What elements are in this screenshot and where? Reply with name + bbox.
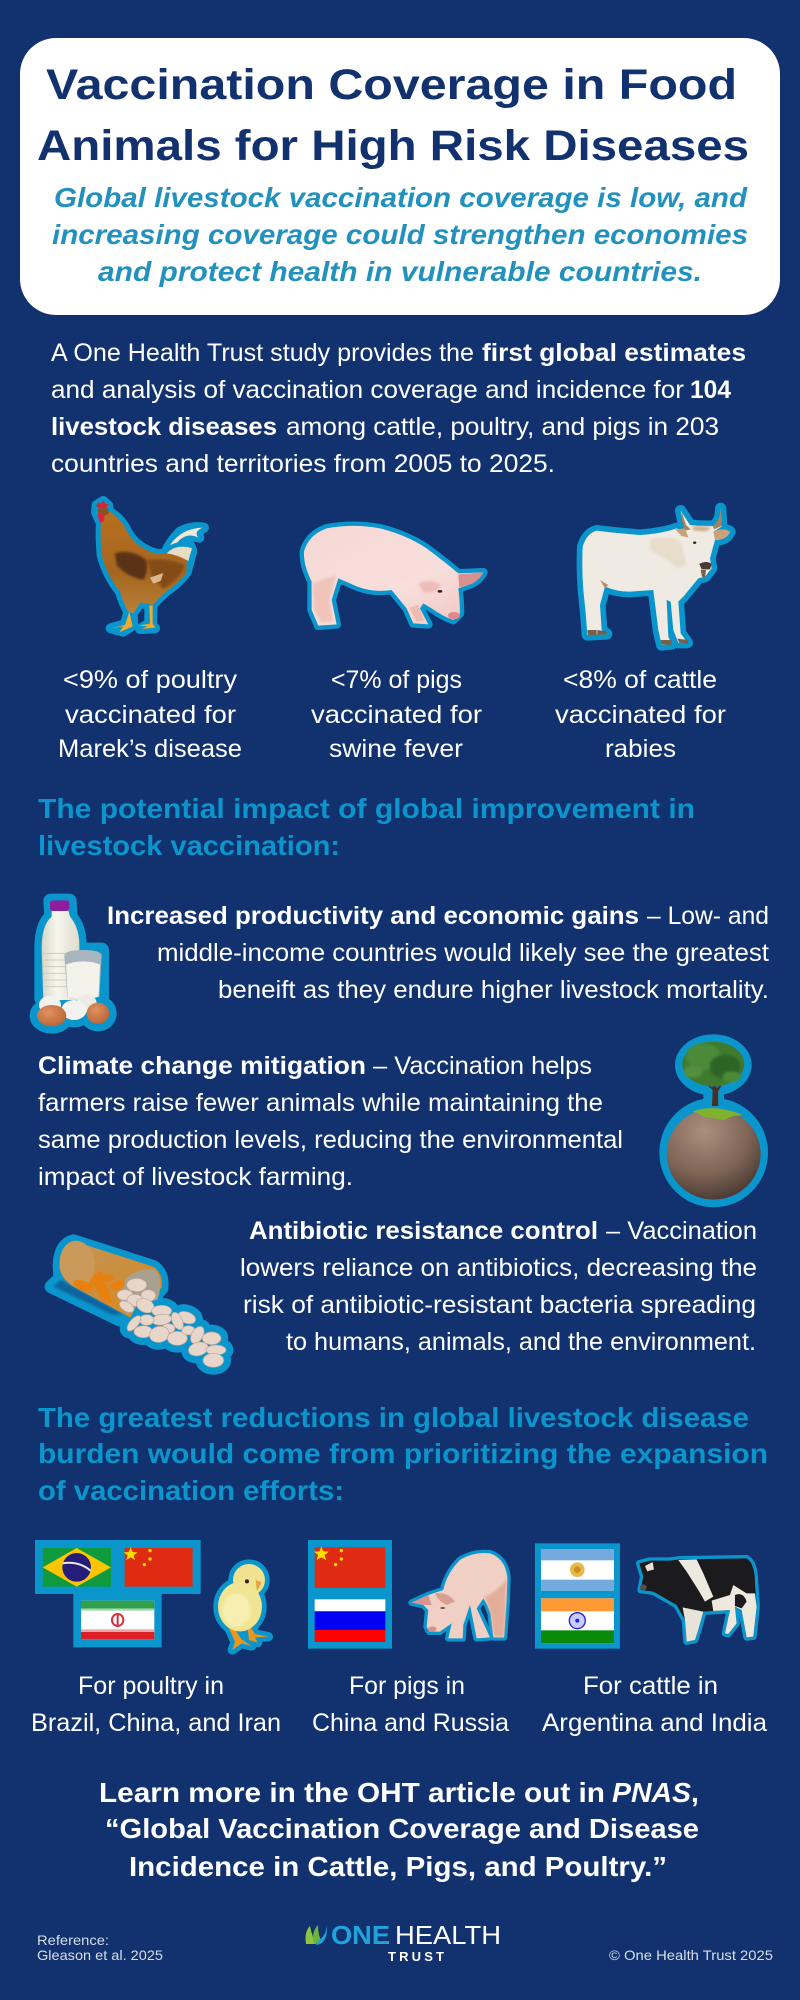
text block: cattle countries — [542, 1672, 767, 1737]
title — [37, 61, 749, 170]
callout: learn more: Incidence in Cattle, Pigs, and Poultry.” — [129, 1851, 667, 1882]
icon: black and white cow — [639, 1558, 757, 1642]
icon: chick — [218, 1564, 268, 1650]
text block: cattle statistic: vaccinated for — [555, 701, 726, 729]
text block: pig statistic: vaccinated for — [311, 701, 482, 729]
text block: antibiotic resistance: to humans, animals, and the environment. — [286, 1328, 756, 1356]
heading: greatest reductions: The greatest reductions in global livestock disease — [38, 1402, 749, 1433]
text block: antibiotic resistance: lowers reliance on antibiotics, decreasing the — [240, 1254, 757, 1282]
icon: chicken — [96, 500, 204, 632]
text block: poultry statistic — [58, 666, 242, 763]
text block: poultry countries: Brazil, China, and Iran — [31, 1709, 281, 1737]
panel: title card — [20, 38, 780, 315]
subtitle — [52, 182, 748, 287]
icon: pig — [304, 526, 483, 626]
text block: study introduction: livestock diseases — [51, 413, 277, 441]
text block: pig statistic — [311, 666, 482, 763]
icon: pig facing left — [412, 1553, 507, 1638]
flags: Argentina, India — [535, 1543, 620, 1649]
text block: productivity: middle-income countries would likely see the greatest — [157, 939, 769, 967]
text block: climate: Climate change mitigation — [38, 1052, 366, 1080]
text block: productivity — [107, 902, 769, 1004]
heading: potential impact: livestock vaccination: — [38, 830, 340, 861]
reference note — [37, 1932, 163, 1963]
heading: potential impact: The potential impact of global improvement in — [38, 793, 695, 824]
logo: One Health Trust: ONE — [331, 1920, 390, 1950]
icon: pill bottle — [51, 1238, 226, 1367]
text block: poultry countries: For poultry in — [78, 1672, 224, 1700]
text block: pig statistic: swine fever — [329, 735, 463, 763]
text block: cattle countries: For cattle in — [583, 1672, 718, 1700]
logo: One Health Trust: TRUST — [388, 1949, 444, 1964]
text block: climate: – Vaccination helps — [373, 1052, 592, 1080]
icon: logo leaf — [306, 1925, 327, 1945]
text block: pig statistic: <7% of pigs — [331, 666, 462, 694]
callout: learn more: “Global Vaccination Coverage and Disease — [105, 1813, 699, 1844]
text block: productivity: beneift as they endure higher livestock mortality. — [218, 976, 769, 1004]
subtitle: and protect health in vulnerable countries. — [98, 256, 702, 287]
icon: milk and eggs — [37, 900, 109, 1026]
reference note: Gleason et al. 2025 — [37, 1947, 163, 1963]
flags: China, Russia — [308, 1540, 392, 1649]
text block: pig countries: For pigs in — [349, 1672, 465, 1700]
callout: learn more: , — [691, 1777, 699, 1808]
text block: study introduction — [51, 339, 746, 478]
text block: pig countries — [312, 1672, 509, 1737]
text block: climate: farmers raise fewer animals while maintaining the — [38, 1089, 603, 1117]
text block: antibiotic resistance: Antibiotic resistance control — [249, 1217, 598, 1245]
text block: pig countries: China and Russia — [312, 1709, 509, 1737]
text block: study introduction: 104 — [690, 376, 731, 404]
text block: antibiotic resistance: risk of antibiotic-resistant bacteria spreading — [243, 1291, 756, 1319]
text block: study introduction: among cattle, poultry, and pigs in 203 — [286, 413, 719, 441]
flags: Brazil, China, Iran — [35, 1540, 201, 1647]
copyright note: © One Health Trust 2025 — [609, 1947, 773, 1963]
text block: study introduction: countries and territories from 2005 to 2025. — [51, 450, 555, 478]
subtitle: increasing coverage could strengthen economies — [52, 219, 748, 250]
logo: One Health Trust: HEALTH — [395, 1920, 501, 1950]
text block: climate: same production levels, reducing the environmental — [38, 1126, 623, 1154]
title: Animals for High Risk Diseases — [37, 122, 749, 170]
text block: cattle statistic: rabies — [605, 735, 676, 763]
text block: study introduction: first global estimates — [482, 339, 746, 367]
heading: greatest reductions: burden would come from prioritizing the expansion — [38, 1438, 768, 1469]
text block: poultry countries — [31, 1672, 281, 1737]
heading: potential impact — [38, 793, 695, 861]
text block: cattle statistic — [555, 666, 726, 763]
text block: climate — [38, 1052, 623, 1191]
text block: climate: impact of livestock farming. — [38, 1163, 353, 1191]
heading: greatest reductions — [38, 1402, 768, 1506]
text block: productivity: Increased productivity and economic gains — [107, 902, 639, 930]
text block: study introduction: A One Health Trust study provides the — [51, 339, 474, 367]
reference note: Reference: — [37, 1932, 109, 1948]
callout: learn more: Learn more in the OHT article out in — [99, 1777, 605, 1808]
icon: tree on soil globe — [659, 1034, 768, 1207]
text block: antibiotic resistance: – Vaccination — [606, 1217, 757, 1245]
callout: learn more: PNAS — [612, 1777, 691, 1808]
text block: cattle countries: Argentina and India — [542, 1709, 767, 1737]
subtitle: Global livestock vaccination coverage is low, and — [54, 182, 748, 213]
text block: cattle statistic: <8% of cattle — [563, 666, 717, 694]
title: Vaccination Coverage in Food — [46, 61, 737, 109]
logo: One Health Trust — [306, 1920, 501, 1964]
heading: greatest reductions: of vaccination efforts: — [38, 1475, 344, 1506]
text block: study introduction: and analysis of vaccination coverage and incidence for — [51, 376, 684, 404]
text block: productivity: – Low- and — [647, 902, 769, 930]
callout: learn more — [99, 1777, 699, 1882]
icon: white cow — [582, 508, 730, 645]
text block: poultry statistic: vaccinated for — [65, 701, 236, 729]
text block: poultry statistic: Marek’s disease — [58, 735, 242, 763]
text block: antibiotic resistance — [240, 1217, 757, 1356]
text block: poultry statistic: <9% of poultry — [63, 666, 238, 694]
